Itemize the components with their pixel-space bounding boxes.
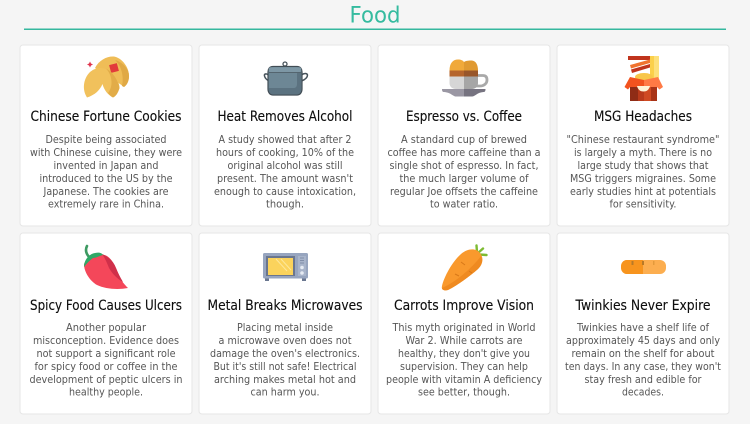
text block: Twinkies have a shelf life of [576, 322, 709, 334]
title: Food [350, 2, 400, 28]
text block: invented in Japan and [54, 160, 158, 172]
text block: coffee has more caffeine than a [388, 147, 540, 159]
text block [566, 134, 720, 210]
text block: supervision. They can help [400, 361, 528, 373]
heading: Espresso vs. Coffee [406, 109, 522, 125]
icon: microwave [263, 253, 308, 281]
text block: approximately 45 days and only [566, 335, 720, 347]
text block: to water ratio. [430, 198, 498, 210]
text block: single shot of espresso. In fact, [390, 160, 538, 172]
text block: damage the oven's electronics. [210, 348, 360, 360]
icon: fortune cookie [84, 56, 129, 98]
text block: hours of cooking, 10% of the [216, 147, 354, 159]
panel: Twinkies Never Expire [557, 233, 729, 414]
heading: Metal Breaks Microwaves [208, 298, 362, 314]
text block: Placing metal inside [237, 322, 333, 334]
text block [565, 322, 721, 398]
text block: for sensitivity. [610, 198, 676, 210]
icon: cooking pot [264, 62, 308, 95]
text block [386, 322, 542, 398]
icon: noodle box [624, 56, 663, 101]
panel: Chinese Fortune Cookies [20, 45, 192, 226]
text block: arching makes metal hot and [214, 374, 356, 386]
text block [214, 134, 356, 210]
text block: is largely a myth. There is no [574, 147, 712, 159]
text block: people with vitamin A deficiency [386, 374, 542, 386]
text block: enough to cause intoxication, [214, 186, 356, 198]
icon: chili pepper [84, 246, 128, 289]
text block: see better, though. [418, 386, 510, 398]
panel: MSG Headaches [557, 45, 729, 226]
text block: A standard cup of brewed [401, 134, 527, 146]
text block: for spicy food or coffee in the [34, 361, 178, 373]
panel: Heat Removes Alcohol [199, 45, 371, 226]
text block: stay fresh and edible for [584, 374, 702, 386]
text block: decades. [622, 386, 664, 398]
text block: large study that shows that [578, 160, 708, 172]
text block [30, 134, 182, 210]
text block: early studies hint at potentials [570, 186, 716, 198]
heading: Chinese Fortune Cookies [30, 109, 182, 125]
text block: healthy people. [69, 386, 143, 398]
text block: with Chinese cuisine, they were [30, 147, 182, 159]
icon: coffee cup [442, 60, 487, 96]
heading: Twinkies Never Expire [575, 298, 710, 314]
text block: remain on the shelf for about [572, 348, 714, 360]
text block: regular Joe offsets the caffeine [390, 186, 538, 198]
text block: extremely rare in China. [48, 198, 164, 210]
text block: This myth originated in World [392, 322, 536, 334]
text block: War 2. While carrots are [406, 335, 522, 347]
panel: Spicy Food Causes Ulcers [20, 233, 192, 414]
text block: present. The amount wasn't [217, 173, 353, 185]
text block: misconception. Evidence does [33, 335, 179, 347]
icon: carrot [442, 246, 486, 290]
text block: But it's still not safe! Electrical [214, 361, 356, 373]
text block: though. [266, 198, 304, 210]
panel: Metal Breaks Microwaves [199, 233, 371, 414]
text block [30, 322, 182, 398]
text block: can harm you. [250, 386, 320, 398]
text block [210, 322, 360, 398]
panel: Espresso vs. Coffee [378, 45, 550, 226]
text block: A study showed that after 2 [218, 134, 352, 146]
icon: twinkie [621, 260, 666, 274]
heading: Spicy Food Causes Ulcers [30, 298, 182, 314]
text block: Japanese. The cookies are [43, 186, 169, 198]
text block: Despite being associated [46, 134, 166, 146]
text block: introduced to the US by the [40, 173, 172, 185]
text block: original alcohol was still [228, 160, 342, 172]
text block: Another popular [66, 322, 147, 334]
text block: development of peptic ulcers in [30, 374, 182, 386]
text block: healthy, they don't give you [398, 348, 530, 360]
heading: Carrots Improve Vision [394, 298, 534, 314]
text block: the much larger volume of [400, 173, 529, 185]
text block [388, 134, 540, 210]
heading: Heat Removes Alcohol [218, 109, 352, 125]
text block: "Chinese restaurant syndrome" [566, 134, 720, 146]
heading: MSG Headaches [594, 109, 692, 125]
text block: a microwave oven does not [218, 335, 352, 347]
text block: not support a significant role [36, 348, 176, 360]
panel: Carrots Improve Vision [378, 233, 550, 414]
text block: ten days. In any case, they won't [565, 361, 721, 373]
text block: MSG triggers migraines. Some [570, 173, 716, 185]
